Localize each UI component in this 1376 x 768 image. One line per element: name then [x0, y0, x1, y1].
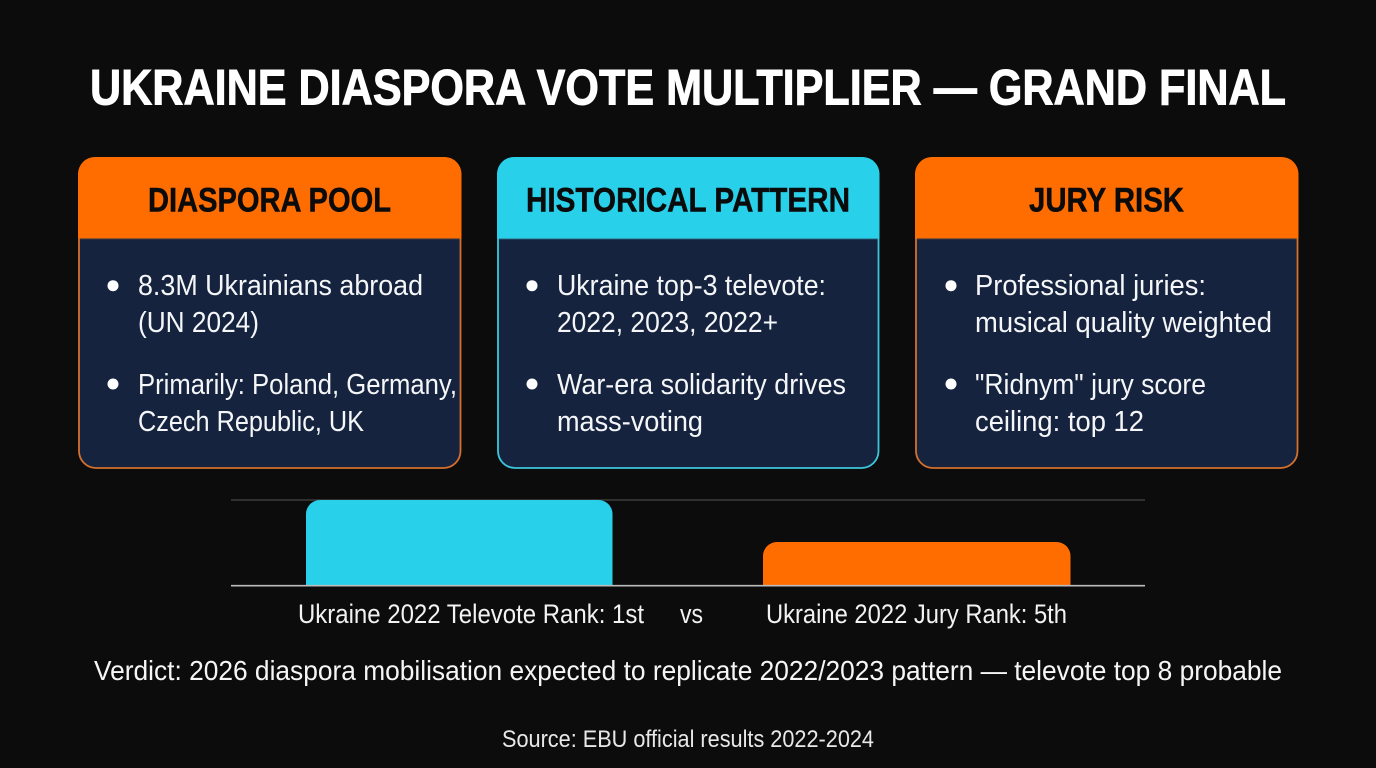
label: televote rank: Ukraine 2022 Televote Rank: 1st	[298, 599, 644, 629]
bullet list: historical pattern: mass-voting	[557, 406, 703, 438]
bullet list: jury risk	[946, 270, 1272, 438]
bullet list: diaspora pool: 8.3M Ukrainians abroad	[138, 270, 423, 302]
bullet list: historical pattern: War-era solidarity drives	[557, 369, 846, 401]
heading: jury risk: JURY RISK	[1029, 182, 1184, 220]
bullet list: diaspora pool: Czech Republic, UK	[138, 406, 365, 438]
bullet list: jury risk: "Ridnym" jury score	[975, 369, 1206, 401]
verdict: Verdict: 2026 diaspora mobilisation expected to replicate 2022/2023 pattern — televote top 8 probable	[94, 655, 1282, 686]
bullet list: diaspora pool: (UN 2024)	[138, 307, 259, 339]
bar: jury rank	[763, 542, 1070, 586]
label: jury rank: Ukraine 2022 Jury Rank: 5th	[766, 599, 1067, 629]
panel: historical pattern	[497, 157, 880, 468]
bullet list: jury risk: ceiling: top 12	[975, 406, 1144, 438]
bullet list: diaspora pool: Primarily: Poland, Germany,	[138, 369, 457, 401]
panel: diaspora pool	[78, 157, 462, 468]
source: Source: EBU official results 2022-2024	[502, 726, 874, 753]
bullet list: historical pattern	[526, 270, 846, 438]
bar chart: televote vs jury rank	[231, 500, 1145, 629]
bullet list: historical pattern: Ukraine top-3 televote:	[557, 270, 826, 302]
bullet list: diaspora pool	[108, 270, 457, 438]
bullet list: jury risk: Professional juries:	[975, 270, 1206, 302]
bullet list: jury risk: musical quality weighted	[975, 307, 1272, 339]
heading: diaspora pool: DIASPORA POOL	[148, 182, 391, 220]
bar: televote rank	[306, 500, 612, 586]
label: vs: vs	[680, 599, 703, 629]
heading: historical pattern: HISTORICAL PATTERN	[526, 182, 850, 220]
bullet list: historical pattern: 2022, 2023, 2022+	[557, 307, 778, 339]
panel: jury risk	[915, 157, 1298, 468]
